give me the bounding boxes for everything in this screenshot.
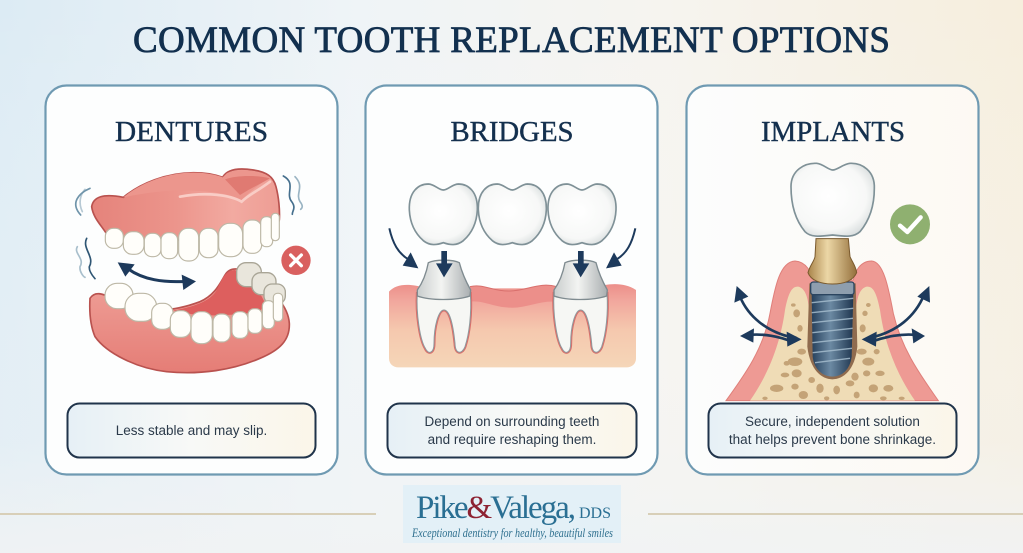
illustration: slipping dentures (76, 169, 311, 373)
arrows: bridge placement (389, 228, 635, 277)
logo: Pike & Valega, DDS: Pike&Valega, (416, 490, 576, 526)
icon: green check (890, 204, 930, 244)
title: COMMON TOOTH REPLACEMENT OPTIONS (133, 20, 890, 61)
heading: implants: IMPLANTS (761, 116, 905, 148)
upper denture (92, 169, 280, 261)
illustration: dental bridge (389, 184, 636, 367)
arrow: denture movement (118, 262, 196, 290)
logo: Pike & Valega, DDS: DDS (579, 505, 611, 522)
caption: implants (708, 404, 956, 458)
logo: Pike & Valega, DDS (403, 485, 621, 543)
panel: dentures (46, 86, 338, 474)
heading: bridges: BRIDGES (450, 116, 574, 148)
caption: implants: Secure, independent solution (745, 414, 920, 429)
arrows: bone force (734, 286, 930, 347)
caption: bridges: and require reshaping them. (428, 432, 596, 447)
icon: red x (281, 246, 311, 275)
caption: dentures: Less stable and may slip. (116, 423, 267, 438)
panel: implants (686, 86, 978, 474)
panel: bridges (366, 86, 658, 474)
caption: implants: that helps prevent bone shrinkage. (729, 432, 936, 447)
lower denture (90, 263, 289, 373)
heading: dentures: DENTURES (115, 116, 268, 148)
caption: bridges (388, 404, 636, 458)
logo: Pike & Valega, DDS: Exceptional dentistry for healthy, beautiful smiles (411, 526, 613, 540)
illustration: dental implant (726, 163, 938, 401)
caption: dentures (68, 404, 316, 458)
caption: bridges: Depend on surrounding teeth (425, 414, 599, 429)
